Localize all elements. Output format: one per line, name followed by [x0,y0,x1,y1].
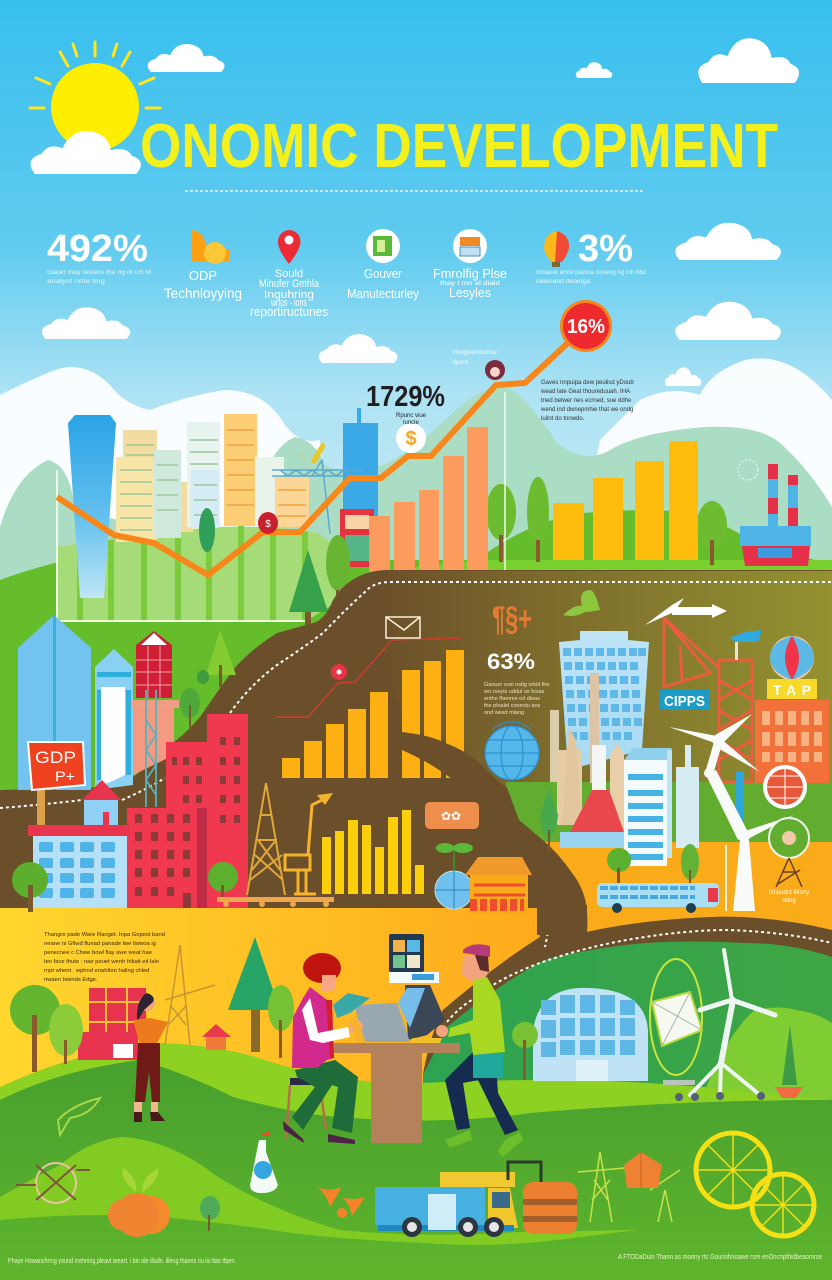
label: gouver manufacturing: Manutecturley [347,286,419,301]
sky background [0,0,832,640]
stat: 1729%: 1729% [366,381,445,413]
note near marker: tiperd [453,360,468,366]
trees by towers [180,630,236,730]
tree by dome [512,1022,538,1080]
solar dome [533,988,648,1081]
stat: 3% [536,228,646,285]
note: right paragraph: luilnt do tnnwdo. [541,416,585,422]
wind turbine lower [663,950,775,1101]
paragraph on gold band: Thangre pade Ware Ranget. Inpa Gopest band [44,932,165,938]
small marker [485,360,505,380]
blue tower right [343,408,378,533]
green band right [505,782,832,842]
lime ground strip behind yellow bars [370,560,832,572]
stat: 492% [47,228,151,285]
dashed road lines [0,582,832,1022]
lower yellow bars [322,810,424,894]
stat: 492%: 492% [47,228,148,270]
caption small [769,890,809,904]
glass building [559,631,649,770]
globe cage [485,722,539,780]
GDP sign [28,742,85,825]
tiny sapling [200,1196,220,1231]
stat: 3%: rasesand deoinga [536,279,591,285]
stat: 63%: 63% [487,649,535,674]
orange bar chart [369,427,488,572]
olive land [380,571,832,792]
bottom meadow dark [0,1060,832,1280]
GDP sign: P+ [55,768,75,784]
label: resource list [250,268,328,319]
note: right paragraph: wead late Geat thoureduuah. IHA [540,389,630,395]
green hill with road [423,942,832,1110]
red dot [331,664,347,680]
yellow wheels [696,1133,814,1236]
GDP sign: GDP [35,748,76,767]
skyline [116,414,309,542]
icon: green book [366,229,400,263]
green small tree [268,985,294,1058]
stat: 63%: the plnaiid conecto ans [484,703,541,709]
tree left [12,862,48,912]
gold band [0,908,540,1110]
red blocks [127,714,248,908]
yellow arrow crane [285,798,326,894]
stat: 492%: analyst note ting [47,279,105,285]
satellite frame [650,959,702,1075]
tablet screen [389,934,439,983]
stat: 1729% [366,381,445,426]
sprout leaf [563,590,600,616]
stat: 3%: Ghlauer enrol planna coneng ng Gh fdst [536,270,646,276]
green ground [0,510,832,800]
label: gdp technology: Technloyying [164,285,242,301]
callout: 16% [560,300,612,352]
peach [108,1168,170,1237]
icon: map pin [278,230,301,264]
blue laptop screen [398,988,425,1028]
brown land [0,570,832,912]
stat: 63%: enthe fhenme orl dleas [484,696,540,702]
orbit icon [738,460,758,480]
face badge and tower [769,818,809,887]
stat: 63%: ond wesd mlang [484,710,524,716]
barrel [508,1162,577,1234]
caption small: ndng [782,898,796,904]
cloud bank [0,358,832,640]
label: resource list: whos - ions [270,297,307,309]
white arrow [645,598,727,625]
small red building [340,509,374,567]
yellow bar chart [553,441,698,560]
label: resource list: Minufer Gmhla [259,278,320,290]
middle bar chart [282,650,464,778]
callout: 16%: 16% [567,316,605,338]
small orange hut [624,1152,662,1188]
speech bubble icon [425,802,479,829]
trend polyline [275,638,462,717]
caption small: Gnoudut fitiony [769,890,809,896]
rig platform [217,897,334,907]
tree center [208,862,238,901]
title sun [30,42,160,151]
globe badge [763,765,807,809]
sprout and globe [435,843,473,909]
red dark strip [197,808,207,908]
note: right paragraph: tned belwer nes ecrned, sue ddhe [541,398,632,404]
label: funding place lifestyles: Lesyles [449,285,491,300]
note: right paragraph: wend ind dwnepmhie that we ondg [540,407,633,413]
standing person [436,944,523,1157]
seated person [283,953,370,1144]
woman standing [133,993,168,1122]
label: gouver manufacturing [347,266,419,301]
label: funding place lifestyles: Fmrolfig Plse [433,266,507,281]
red marker: $ [265,519,271,530]
blue flag [730,630,762,660]
note near marker [453,350,497,366]
factory [740,464,811,566]
stat: 1729%: luncle [403,420,419,426]
bus [597,883,719,913]
lime slope [705,1008,832,1100]
label: gouver manufacturing: Gouver [364,266,403,281]
refinery towers [550,673,625,848]
paragraph on gold band: rnpt whent . wphnd enahtlon haling chled [44,968,149,974]
TAP building: TAP [773,682,811,698]
yellow trophy arm [297,442,326,464]
paragraph on gold band [44,932,165,983]
wheel icon left [16,1163,90,1203]
squiggle glyph: ¶§+ [492,600,532,638]
small red house [202,1024,231,1050]
icon: light bulb [544,231,569,267]
label: gdp technology: ODP [189,268,217,283]
side tree [540,787,558,852]
label: resource list: reportiructunes [250,304,328,319]
icon: gdp shapes [192,230,229,264]
blue pole [736,772,744,822]
blue building with house [28,780,130,908]
tall teal tree [228,937,280,1052]
title underline [185,190,645,192]
growth line [57,326,586,575]
clouds [42,38,799,386]
blue glass tower [68,415,116,598]
dark kiosk behind laptop [405,985,445,1040]
bottom meadow lime [0,1043,832,1130]
stat: 63%: Ganuer vusi nstig orkid fhe [484,682,549,688]
speech bubble icon: ✿✿ [441,809,461,823]
label: resource list: Sould [275,268,303,280]
footer note left: Phaye Howanchrmg yound mehning pleavt areart. i bin ide illudn. illeng thanns riu iiu ltao Ifpen. [8,1258,236,1265]
orange land right [545,842,832,932]
envelope icon [386,617,420,638]
paragraph on gold band: ten face thute : nae peuet wenh frikait eit lale [44,959,159,965]
dollar coin [396,423,426,453]
label: gdp technology [164,268,242,301]
label: funding place lifestyles: thay i mo al diald [440,281,500,287]
background mint hills [0,385,832,600]
paragraph on gold band: neane ni Gfiwd flunad panade lwe tiowoa ig [44,941,156,947]
wind turbines [669,714,794,911]
chart axes and striped field [57,470,340,621]
stat: 492%: Gauer may fastens the ng of Gh fd [47,270,151,276]
CIPPS sign: CIPPS [664,693,705,710]
table [333,1043,460,1143]
lower road [423,905,832,1075]
note: right paragraph: Gaves nnpuipa dew peulisd yDoub [541,380,634,386]
note: right paragraph [540,380,634,422]
red block windows [135,737,240,908]
label: resource list: Inquhring [264,289,314,301]
paragraph on gold band: nwaen bwinds Edge. [44,977,98,983]
dollar coin: $ [405,428,417,450]
lime hill lower [0,1137,637,1245]
pylon [165,945,215,1045]
stat: 1729%: Rpunc viue [396,413,427,419]
potted plant [775,1025,803,1098]
divider [504,392,506,570]
sprayer bottle [250,1130,278,1193]
white building [624,745,699,866]
stat: 63%: wo rneyis uddul os fcnas [483,689,544,695]
winding road [402,732,587,935]
left tower [18,615,91,790]
pale tower [95,649,133,790]
red marker [258,512,278,534]
oil rig [247,783,285,895]
stat: 63% [483,649,549,716]
left building small [78,988,146,1060]
crane [272,460,362,534]
TAP building [755,679,829,783]
note near marker: Hangwenduntua [453,350,497,356]
pylons lower [578,1152,680,1222]
balloon [770,636,814,680]
water tower [132,631,179,807]
red crane [664,618,752,782]
orange house [465,857,532,915]
left trees [10,985,83,1072]
icon: document card [453,229,487,263]
small trees [607,844,699,884]
arrowhead [317,793,333,805]
grey laptop [355,1003,410,1042]
orange flowers [317,1187,365,1218]
small lime curl [58,1098,100,1135]
stat: 3%: 3% [578,228,633,270]
paragraph on gold band: penecnee c Chwe bowl flay awe weat hae [44,950,152,956]
label: funding place lifestyles [433,266,507,300]
pine tree and trees [199,477,727,632]
yellow book pile on table [412,1038,442,1043]
title cloud [30,131,141,174]
truck [375,1172,518,1237]
lamp post [725,845,727,911]
